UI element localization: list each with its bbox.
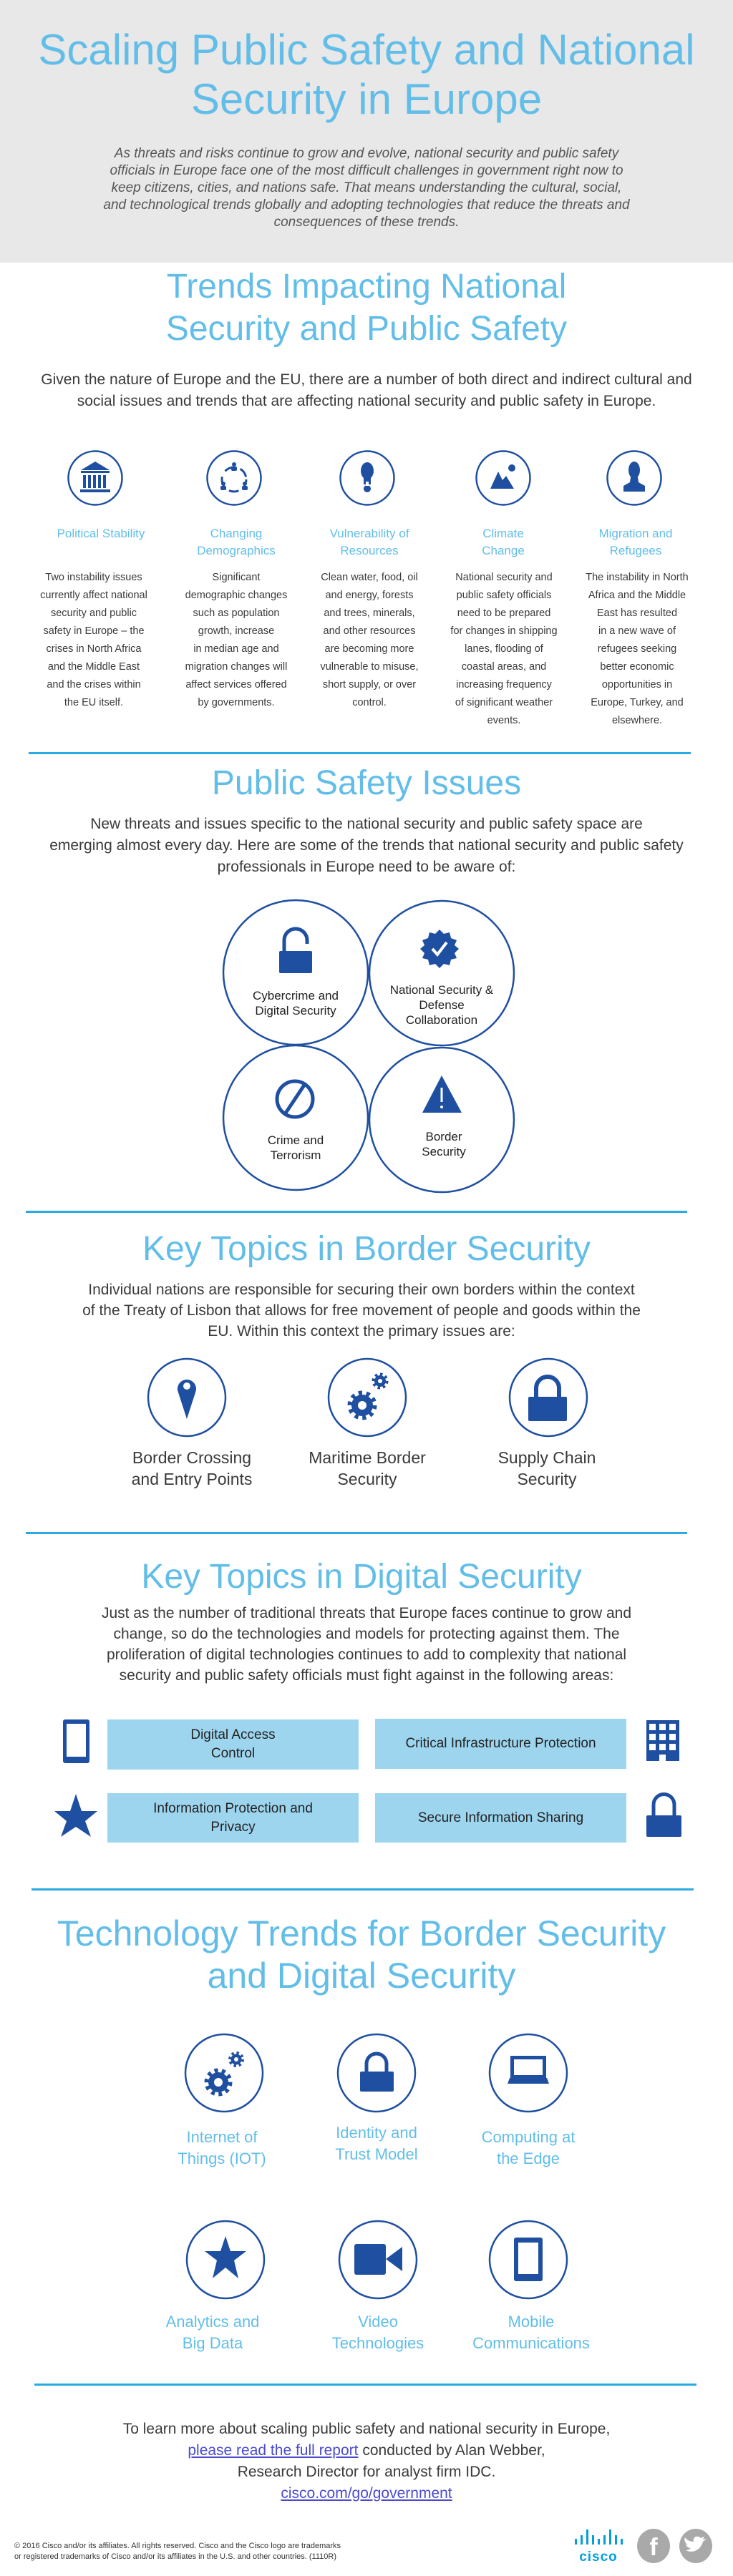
trend: climate change: Climate [482, 527, 524, 540]
icon: facebook: f [649, 2534, 658, 2561]
intro text: and technological trends globally and adopting technologies that reduce the threats and [103, 197, 630, 213]
heading: technology trends: Technology Trends for Border Security [57, 1913, 666, 1953]
trend: migration and refugees: Refugees [610, 544, 661, 557]
box: digital access control: Control [211, 1746, 255, 1761]
border intro: of the Treaty of Lisbon that allows for free movement of people and goods within the [82, 1302, 641, 1319]
heading: technology trends: and Digital Security [208, 1956, 515, 1996]
icon: video camera [339, 2221, 417, 2298]
label: mobile [472, 2313, 590, 2352]
trend: climate change: Change [482, 544, 525, 557]
label: edge: Computing at [482, 2128, 575, 2146]
label: edge [482, 2128, 576, 2167]
icon: political stability [69, 451, 122, 505]
label: analytics [166, 2313, 259, 2352]
title [38, 26, 695, 123]
divider [31, 1888, 694, 1890]
copyright [14, 2542, 341, 2561]
box: critical infrastructure: Critical Infrastructure Protection [405, 1736, 596, 1751]
icon: changing demographics [208, 451, 261, 505]
trends intro: social issues and trends that are affecting national security and public safety in Europe. [77, 393, 656, 409]
footer call to action: Research Director for analyst firm IDC. [238, 2464, 495, 2480]
intro text: consequences of these trends. [274, 215, 459, 230]
trend: political stability [40, 527, 147, 708]
border intro: Individual nations are responsible for securing their own borders within the context [88, 1282, 635, 1298]
copyright: or registered trademarks of Cisco and/or its affiliates in the U.S. and other countries. (1110R) [14, 2552, 336, 2561]
label: crime and terrorism: Terrorism [271, 1148, 321, 1162]
label: crime and terrorism [268, 1133, 324, 1162]
label: mobile: Communications [472, 2334, 590, 2352]
trends intro: Given the nature of Europe and the EU, there are a number of both direct and indirect cultural and [41, 371, 692, 388]
label: analytics: Analytics and [166, 2313, 259, 2331]
divider [26, 1532, 687, 1534]
digital intro: security and public safety officials must fight against in the following areas: [120, 1667, 613, 1684]
icon: padlock [646, 1795, 681, 1837]
circle: cybercrime [223, 900, 368, 1045]
divider [34, 2384, 696, 2386]
label: maritime: Maritime Border [309, 1448, 426, 1467]
footer call to action [123, 2421, 610, 2502]
label: border security: Security [422, 1145, 466, 1158]
text: need to be prepared [457, 608, 550, 619]
trend: changing demographics: Demographics [197, 544, 276, 557]
label: national security: Defense [419, 998, 465, 1012]
header background [0, 0, 733, 263]
footer call to action: To learn more about scaling public safety and national security in Europe, [123, 2421, 610, 2437]
text: public safety officials [457, 590, 551, 601]
label: border crossing: Border Crossing [132, 1448, 251, 1467]
circle: border security [369, 1048, 514, 1192]
text: currently affect national [40, 590, 147, 601]
trend: political stability: Political Stability [57, 527, 145, 540]
label: border security: Border [425, 1130, 462, 1143]
label: crime and terrorism: Crime and [268, 1133, 324, 1147]
text: elsewhere. [612, 715, 662, 726]
icon: mobile phone [490, 2221, 567, 2298]
circle: national security collaboration [369, 901, 514, 1045]
text: Europe, Turkey, and [591, 697, 684, 708]
label: cybercrime: Digital Security [255, 1004, 336, 1018]
label: identity [335, 2124, 418, 2163]
text: Two instability issues [45, 572, 142, 583]
text: and the crises within [47, 679, 141, 691]
text: growth, increase [198, 625, 274, 637]
copyright: © 2016 Cisco and/or its affiliates. All rights reserved. Cisco and the Cisco logo are trademarks [14, 2542, 341, 2550]
icon: twitter [679, 2529, 712, 2563]
icon: supply chain padlock [510, 1359, 587, 1436]
footer call to action: cisco.com/go/government [281, 2485, 452, 2502]
text: better economic [600, 661, 674, 673]
text: and energy, forests [325, 590, 414, 601]
border intro [82, 1282, 641, 1340]
text: opportunities in [602, 679, 672, 691]
box: information protection [107, 1793, 359, 1843]
text: such as population [193, 608, 279, 619]
text: migration changes will [185, 661, 287, 673]
heading: trends: Security and Public Safety [166, 310, 567, 348]
digital intro [102, 1605, 631, 1684]
text: safety in Europe – the [43, 625, 145, 637]
trend: migration and refugees [586, 527, 689, 726]
text: are becoming more [325, 643, 414, 655]
text: refugees seeking [598, 643, 676, 655]
cisco logo: cisco [579, 2550, 618, 2565]
text: affect services offered [185, 679, 287, 691]
box: critical infrastructure [375, 1719, 626, 1769]
text: Significant [213, 572, 260, 583]
text: vulnerable to misuse, [320, 661, 418, 673]
icon: laptop [490, 2034, 567, 2112]
title: Scaling Public Safety and National [38, 26, 695, 74]
box: digital access control [107, 1719, 359, 1770]
label: video: Video [358, 2313, 398, 2331]
text: control. [352, 697, 387, 708]
text: The instability in North [586, 572, 689, 583]
public safety intro: professionals in Europe need to be aware of: [218, 859, 515, 875]
label: maritime: Security [337, 1470, 397, 1488]
label: cybercrime [253, 989, 339, 1018]
divider [29, 752, 691, 754]
trend: climate change [450, 527, 558, 726]
text: lanes, flooding of [465, 643, 543, 655]
icon: map pin [148, 1359, 225, 1436]
heading: digital security: Key Topics in Digital Security [141, 1558, 582, 1596]
text: and other resources [324, 625, 415, 637]
label: maritime [309, 1448, 426, 1488]
text: Clean water, food, oil [321, 572, 418, 583]
text: short supply, or over [323, 679, 416, 691]
box: information protection: Privacy [210, 1819, 256, 1835]
heading: border security: Key Topics in Border Security [142, 1230, 591, 1268]
public safety intro: emerging almost every day. Here are some of the trends that national security and public safety [49, 837, 684, 854]
intro text: keep citizens, cities, and nations safe. That means understanding the cultural, social, [112, 180, 621, 195]
heading: technology trends [57, 1913, 666, 1996]
intro text: As threats and risks continue to grow and evolve, national security and public safety [115, 146, 618, 161]
icon: vulnerability of resources [341, 451, 394, 505]
digital intro: change, so do the technologies and models for protecting against them. The [113, 1626, 620, 1642]
label: identity: Identity and [336, 2124, 417, 2142]
text: of significant weather [455, 697, 553, 708]
label: identity: Trust Model [335, 2145, 418, 2163]
icon: identity padlock [338, 2034, 415, 2112]
label: video [332, 2313, 424, 2352]
text: security and public [51, 608, 137, 619]
text: by governments. [198, 697, 275, 708]
text: the EU itself. [64, 697, 123, 708]
trend: vulnerability of resources: Vulnerability of [330, 527, 409, 540]
public safety intro [49, 816, 684, 875]
label: iot [178, 2128, 266, 2167]
divider [26, 1211, 687, 1213]
label: national security: Collaboration [406, 1013, 477, 1027]
footer call to action: please read the full report conducted by Alan Webber, [188, 2442, 545, 2459]
label: iot: Internet of [186, 2128, 258, 2146]
trend: vulnerability of resources [320, 527, 418, 708]
text: demographic changes [185, 590, 287, 601]
label: supply chain [498, 1448, 596, 1488]
label: border crossing: and Entry Points [132, 1470, 252, 1488]
icon: star [54, 1794, 97, 1837]
trends intro [41, 371, 692, 409]
digital intro: Just as the number of traditional threats that Europe faces continue to grow and [102, 1605, 631, 1621]
label: cybercrime: Cybercrime and [253, 989, 339, 1002]
digital intro: proliferation of digital technologies continues to add to complexity that national [107, 1646, 626, 1663]
circle: crime and terrorism [223, 1045, 368, 1190]
icon: migration and refugees [607, 451, 661, 505]
icon: analytics star [187, 2221, 264, 2298]
text: Africa and the Middle [588, 590, 686, 601]
border intro: EU. Within this context the primary issues are: [208, 1323, 515, 1340]
text: National security and [455, 572, 553, 583]
cisco logo [575, 2529, 623, 2565]
intro text: officials in Europe face one of the most difficult challenges in government right now to [110, 163, 623, 178]
title: Security in Europe [191, 75, 542, 123]
trend: changing demographics [185, 527, 287, 708]
text: in median age and [193, 643, 279, 655]
text: increasing frequency [456, 679, 552, 691]
public safety intro: New threats and issues specific to the national security and public safety space are [90, 816, 643, 832]
text: East has resulted [597, 608, 677, 619]
icon: iot gears [185, 2034, 263, 2112]
heading: trends: Trends Impacting National [167, 268, 566, 306]
label: iot: Things (IOT) [178, 2150, 266, 2167]
text: and trees, minerals, [324, 608, 415, 619]
text: crises in North Africa [47, 643, 141, 655]
trend: migration and refugees: Migration and [598, 527, 673, 540]
text: coastal areas, and [462, 661, 546, 673]
icon: gears [329, 1359, 406, 1436]
text: and the Middle East [48, 661, 140, 673]
icon: facebook [637, 2529, 670, 2563]
intro text [103, 146, 630, 230]
text: in a new wave of [598, 625, 676, 637]
label: edge: the Edge [497, 2150, 560, 2167]
box: secure information sharing: Secure Information Sharing [418, 1810, 583, 1825]
label: national security [390, 983, 493, 1027]
heading: public safety issues: Public Safety Issues [212, 764, 521, 802]
label: supply chain: Supply Chain [498, 1448, 596, 1467]
trend: vulnerability of resources: Resources [340, 544, 399, 557]
label: mobile: Mobile [508, 2313, 554, 2331]
label: border security [422, 1130, 466, 1158]
label: national security: National Security & [390, 983, 493, 997]
text: events. [487, 715, 520, 726]
icon: climate change [477, 451, 530, 505]
label: supply chain: Security [517, 1470, 577, 1488]
box: secure information sharing [375, 1793, 626, 1843]
icon: phone [63, 1719, 89, 1763]
label: analytics: Big Data [183, 2334, 243, 2352]
box: information protection: Information Protection and [153, 1800, 313, 1816]
icon: building [646, 1720, 679, 1761]
text: for changes in shipping [450, 625, 558, 637]
label: border crossing [132, 1448, 252, 1488]
trend: changing demographics: Changing [210, 527, 262, 540]
box: digital access control: Digital Access [190, 1727, 276, 1742]
heading: trends [166, 268, 567, 348]
label: video: Technologies [332, 2334, 424, 2352]
